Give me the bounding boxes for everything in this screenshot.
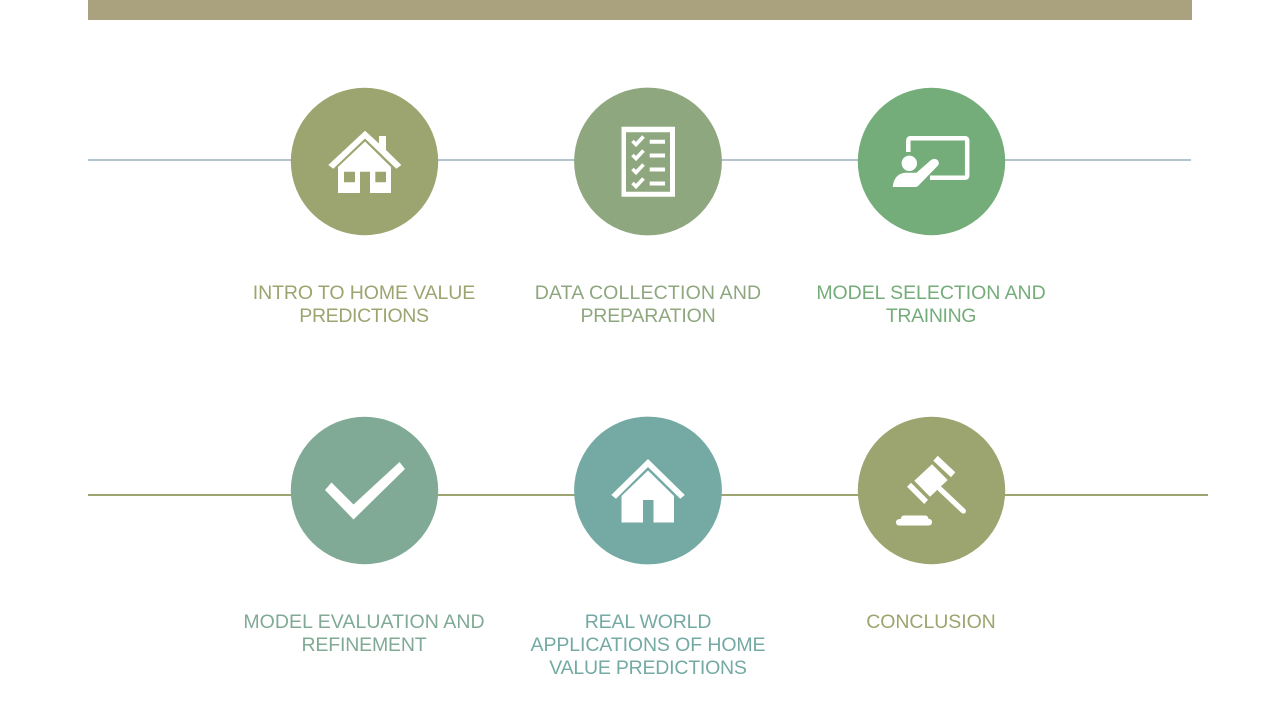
step 4 circle with check mark icon	[291, 417, 438, 564]
step 5 circle with house icon	[574, 417, 722, 564]
step 6 circle with gavel icon	[858, 417, 1005, 564]
step 3 circle with teacher at board icon	[858, 88, 1005, 235]
step 1 circle with house icon	[291, 88, 438, 235]
label: real world applications	[530, 611, 765, 679]
top banner	[88, 0, 1192, 20]
label: data collection and preparation: DATA COLLECTION AND	[535, 282, 761, 304]
label: conclusion: CONCLUSION	[866, 611, 996, 633]
label: data collection and preparation: PREPARATION	[580, 305, 716, 327]
label: real world applications: REAL WORLD	[585, 611, 711, 633]
label: model selection and training: TRAINING	[886, 305, 976, 327]
timeline line: row 1	[88, 159, 1191, 161]
label: real world applications: VALUE PREDICTIONS	[549, 657, 747, 679]
label: model selection and training: MODEL SELECTION AND	[816, 282, 1046, 304]
timeline line: row 2	[88, 494, 1208, 496]
label: intro to home value predictions	[253, 282, 475, 327]
step 2 circle with checklist icon	[574, 88, 722, 235]
label: model evaluation and refinement: MODEL EVALUATION AND	[243, 611, 485, 633]
label: model evaluation and refinement: REFINEMENT	[301, 634, 427, 656]
label: intro to home value predictions: PREDICTIONS	[299, 305, 429, 327]
label: intro to home value predictions: INTRO TO HOME VALUE	[253, 282, 475, 304]
label: model evaluation and refinement	[243, 611, 485, 656]
label: model selection and training	[816, 282, 1046, 327]
label: data collection and preparation	[535, 282, 761, 327]
label: real world applications: APPLICATIONS OF HOME	[531, 634, 765, 656]
